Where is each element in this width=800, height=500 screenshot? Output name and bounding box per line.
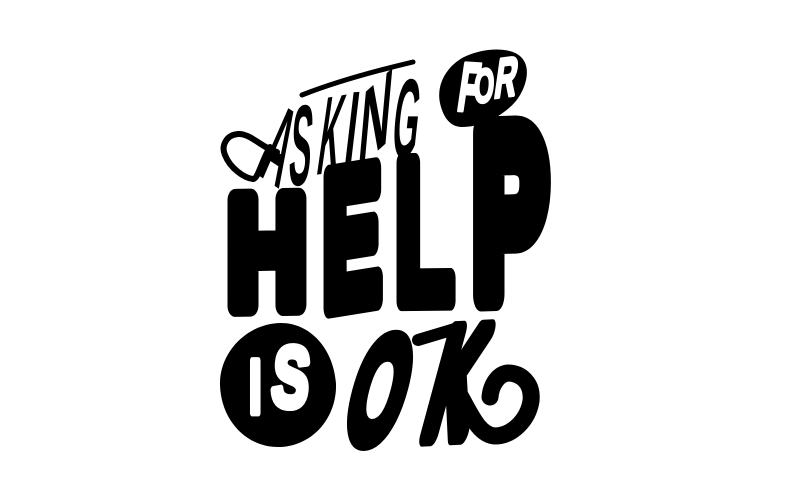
letter P: P <box>474 80 547 345</box>
letter O: O <box>472 59 496 114</box>
swash: loop of the letter A <box>224 134 277 179</box>
badge: IS <box>220 323 336 447</box>
swirl tail of the letter K <box>458 373 531 436</box>
word: HELP <box>228 80 547 349</box>
blob background <box>220 323 336 447</box>
letter G: G <box>387 56 427 181</box>
letter O: O <box>330 306 430 474</box>
letter A: A <box>251 81 308 212</box>
letter E: E <box>323 128 381 349</box>
word: OK <box>330 299 531 474</box>
letter S: S <box>285 81 318 209</box>
bridge stroke joining O and K <box>418 328 458 340</box>
letter R: R <box>491 44 522 110</box>
badge: FOR <box>439 44 527 127</box>
overline stroke <box>302 62 413 95</box>
letter S: S <box>268 329 314 427</box>
letter I: I <box>249 345 262 430</box>
letter K: K <box>312 70 351 199</box>
blob background <box>439 49 527 127</box>
letter K: K <box>412 299 500 467</box>
letter N: N <box>354 41 398 193</box>
letter L: L <box>395 121 454 344</box>
word: ASKING <box>224 41 427 212</box>
letter H: H <box>228 167 306 340</box>
letter I: I <box>339 68 365 192</box>
letter F: F <box>454 49 484 126</box>
